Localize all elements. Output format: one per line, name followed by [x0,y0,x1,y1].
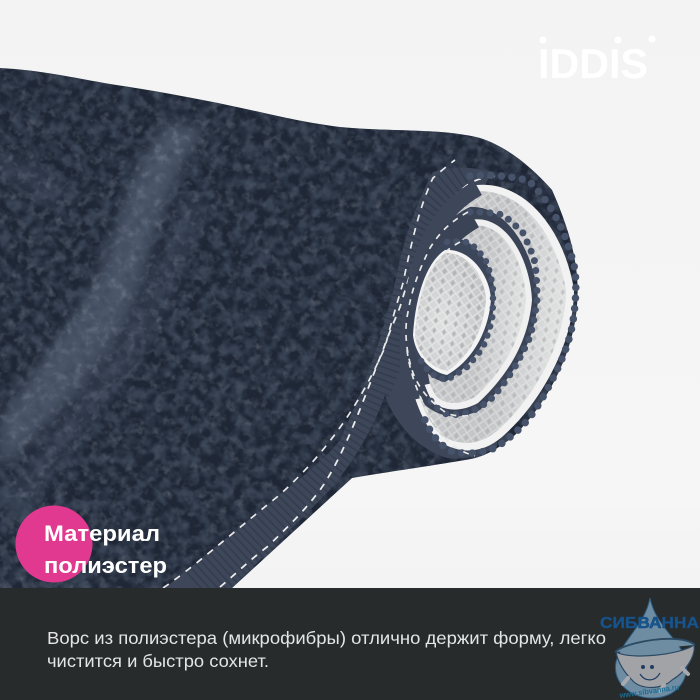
watermark: СИБВАННА [600,598,699,700]
rolled end [405,175,576,456]
inner core lip [413,250,491,375]
brand text: СИБВАННА [600,615,699,632]
inner stitching left [417,242,460,330]
rug texture [0,60,600,590]
second ring beads [430,212,537,414]
second roll backing [420,225,526,403]
ring stitching left [406,212,472,416]
bath eyes [643,665,652,669]
rug tonal stripes [0,122,205,588]
url text: www.sibvanna.ru [618,683,680,700]
bound edge band [165,168,497,588]
description text: Ворс из полиэстера (микрофибры) отлично держит форму, легко [47,628,606,648]
water drop [615,598,687,698]
bath tub [616,645,694,688]
badge heading: полиэстер [44,553,167,578]
outer stitching [163,160,455,588]
bath smile [640,673,660,680]
bath rim [615,639,695,652]
outer roll backing [410,191,566,443]
inner stitching [220,176,500,587]
third roll dark band [412,238,495,382]
bottom stitching [407,350,475,456]
third ring beads [418,241,493,380]
second roll dark band [405,207,538,416]
bath feet [623,668,688,691]
edge ribbing [200,178,470,588]
second roll lip [415,219,532,410]
description text: чистится и быстро сохнет. [47,651,269,671]
logo wordmark: IDDIS [538,40,648,87]
outer ring beads [423,175,576,453]
bottom dark panel [0,588,700,700]
outer roll left shadow band [408,188,478,400]
logo dots [543,39,652,40]
rug pile body [0,68,578,588]
logo: IDDIS [538,39,652,87]
badge heading: Материал [44,521,160,546]
rug [0,60,600,590]
inner core backing [415,253,486,371]
outer roll lip [405,185,574,450]
pink circle [16,506,92,582]
badge: material [16,506,167,582]
second roll left shadow band [420,222,476,385]
